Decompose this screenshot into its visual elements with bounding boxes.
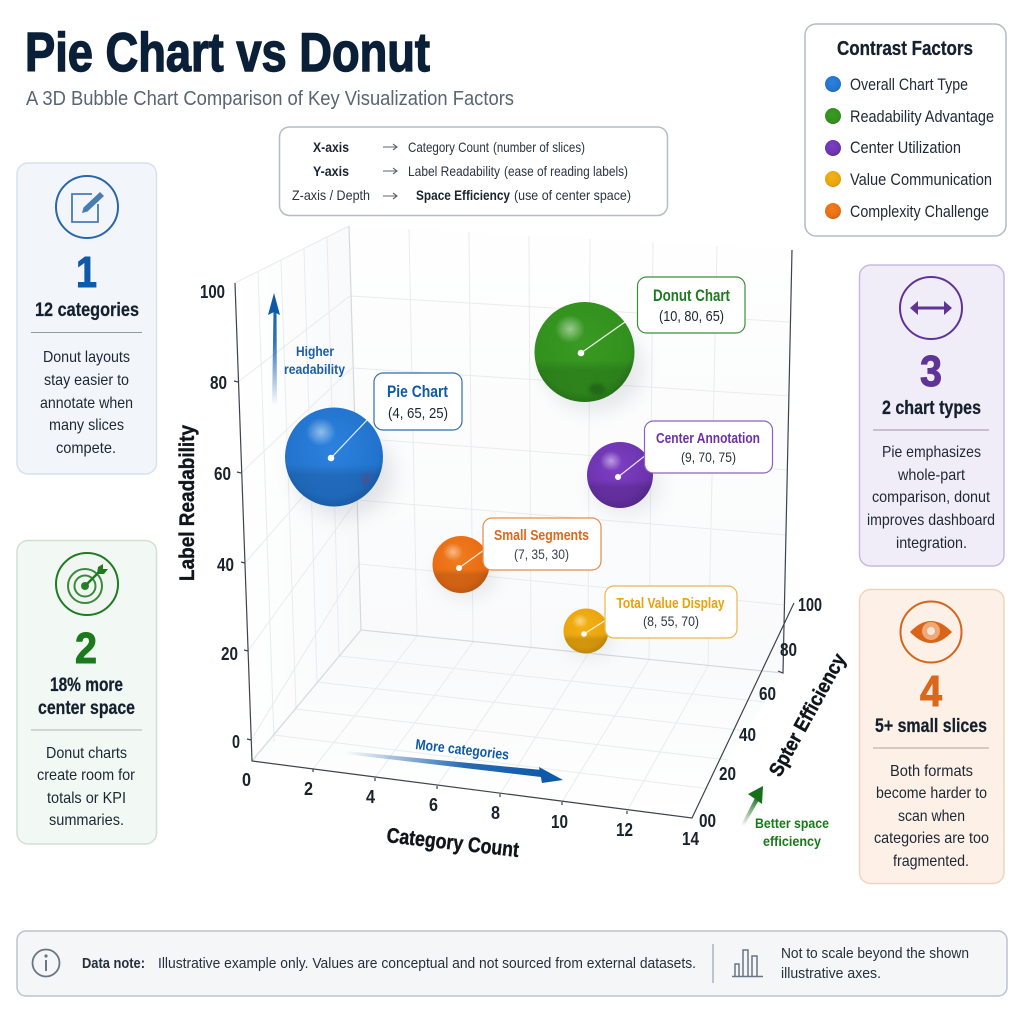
icon: target <box>56 553 118 615</box>
z axis tick labels: 00 <box>699 811 716 831</box>
panel: stat 4: categories are too <box>874 830 989 847</box>
footer: data note: Not to scale beyond the shown <box>781 946 969 962</box>
z axis tick labels: 100 <box>798 595 822 615</box>
y axis tick labels <box>200 282 240 752</box>
axis key panel: (use of center space) <box>514 187 631 203</box>
label: pie chart: Pie Chart <box>387 382 448 401</box>
panel: stat 4: 5+ small slices <box>875 716 987 737</box>
panel: stat 3: 2 chart types <box>882 398 981 419</box>
footer: data note: Data note: <box>82 956 145 972</box>
label: small segments <box>456 518 601 571</box>
arrow: better space efficiency: Better space <box>755 815 829 831</box>
panel: stat 3: integration. <box>896 535 967 552</box>
label: center annotation: Center Annotation <box>656 431 760 447</box>
axes <box>234 250 794 818</box>
panel: stat 2: summaries. <box>49 812 124 829</box>
panel: stat 3 <box>860 265 1004 566</box>
label: donut chart: Donut Chart <box>653 287 730 305</box>
legend panel: contrast factors: Value Communication <box>850 171 992 189</box>
panel: stat 3: 3 <box>920 347 942 396</box>
z axis tick labels <box>699 595 822 831</box>
subtitle: A 3D Bubble Chart Comparison of Key Visualization Factors <box>26 87 514 110</box>
x axis tick labels: 8 <box>491 803 500 823</box>
label: total value display <box>581 586 737 638</box>
x axis tick labels: 12 <box>616 820 633 840</box>
panel: stat 3: improves dashboard <box>867 512 995 529</box>
x axis tick labels: 10 <box>551 812 568 832</box>
x axis tick labels <box>242 770 699 849</box>
z axis tick labels: 60 <box>759 684 776 704</box>
axis key panel <box>280 127 668 216</box>
label: small segments: Small Segments <box>494 528 589 544</box>
panel: stat 2 <box>17 540 156 844</box>
panel: stat 2: create room for <box>37 767 136 784</box>
panel: stat 1: many slices <box>49 417 124 434</box>
axis key panel: (ease of reading labels) <box>504 163 628 179</box>
axis key panel: Y-axis <box>313 163 349 179</box>
arrow: better space efficiency: efficiency <box>763 833 821 849</box>
x axis tick labels: 2 <box>304 779 313 799</box>
panel: stat 2: center space <box>38 698 135 719</box>
panel: stat 1: compete. <box>56 440 116 457</box>
axis key panel: X-axis <box>313 139 349 155</box>
y axis tick labels: 60 <box>214 464 231 484</box>
x axis tick labels: 0 <box>242 770 251 790</box>
x axis tick labels: 4 <box>366 787 375 807</box>
icon: info <box>32 950 60 976</box>
arrow: better space efficiency <box>741 786 829 849</box>
axis key panel: Category Count <box>408 139 489 155</box>
bubble: total value display <box>564 586 737 658</box>
y axis tick labels: 40 <box>217 555 234 575</box>
bubble: small segments <box>432 518 601 598</box>
y axis tick labels: 80 <box>210 373 227 393</box>
panel: stat 2: 18% more <box>50 675 123 696</box>
y axis tick labels: 0 <box>232 732 240 752</box>
legend panel: contrast factors: Readability Advantage <box>850 108 994 126</box>
label: center annotation: (9, 70, 75) <box>681 449 736 465</box>
z axis tick labels: 80 <box>780 640 797 660</box>
footer: data note <box>17 931 1007 996</box>
label: donut chart: (10, 80, 65) <box>659 308 724 325</box>
arrow: more categories <box>345 737 563 783</box>
arrow: higher readability: Higher <box>296 343 334 359</box>
z axis tick labels: 40 <box>739 725 756 745</box>
footer: data note: Illustrative example only. Values are conceptual and not sourced from external datasets. <box>158 956 696 972</box>
x axis tick labels: 6 <box>429 795 438 815</box>
arrow: more categories: More categories <box>415 737 510 764</box>
label: pie chart: (4, 65, 25) <box>388 405 448 422</box>
panel: stat 4: fragmented. <box>893 853 969 870</box>
panel: stat 4: Both formats <box>890 763 973 780</box>
icon: bar chart <box>732 950 763 976</box>
label: total value display: (8, 55, 70) <box>643 613 699 629</box>
x axis tick labels: 14 <box>682 829 699 849</box>
legend panel: contrast factors: Center Utilization <box>850 139 961 157</box>
label: total value display: Total Value Display <box>616 596 724 612</box>
legend panel: contrast factors: Contrast Factors <box>837 38 973 60</box>
icon: double arrow <box>900 277 962 339</box>
arrow: higher readability <box>268 293 345 405</box>
icon: eye <box>900 602 962 662</box>
panel: stat 1: 1 <box>76 248 97 297</box>
panel: stat 2: totals or KPI <box>47 790 126 807</box>
panel: stat 4: scan when <box>898 808 965 825</box>
panel: stat 3: comparison, donut <box>872 489 990 506</box>
3D bubble chart <box>176 226 851 862</box>
panel: stat 1: 12 categories <box>35 300 139 321</box>
y axis tick labels: 20 <box>221 644 238 664</box>
label: donut chart <box>578 277 745 356</box>
axis key panel: Z-axis / Depth <box>292 187 370 203</box>
panel: stat 4 <box>860 590 1004 884</box>
panel: stat 3: Pie emphasizes <box>882 444 981 461</box>
label: pie chart <box>328 373 462 461</box>
panel: stat 1: annotate when <box>40 395 133 412</box>
legend panel: contrast factors <box>805 24 1006 236</box>
axis key panel: Space Efficiency <box>416 187 510 203</box>
title: Pie Chart vs Donut <box>25 21 430 83</box>
panel: stat 3: whole-part <box>897 467 965 484</box>
z axis tick labels: 20 <box>719 764 736 784</box>
bubble: donut chart <box>534 277 745 412</box>
label: center annotation <box>615 421 772 480</box>
panel: stat 1 <box>17 163 156 474</box>
panel: stat 4: 4 <box>920 667 942 716</box>
y axis tick labels: 100 <box>200 282 225 302</box>
panel: stat 2: 2 <box>75 624 97 673</box>
legend panel: contrast factors: Complexity Challenge <box>850 203 989 221</box>
icon: pencil note <box>56 176 118 238</box>
bubble: center annotation <box>587 421 772 514</box>
axis key panel: Label Readability <box>408 163 500 179</box>
legend panel: contrast factors: Overall Chart Type <box>850 76 968 94</box>
panel: stat 1: Donut layouts <box>43 349 130 366</box>
bubble: pie chart <box>285 373 462 518</box>
x axis title: Category Count <box>385 824 520 862</box>
label: small segments: (7, 35, 30) <box>514 546 569 562</box>
panel: stat 4: become harder to <box>876 785 987 802</box>
z axis title: Spter Efficiency <box>765 649 851 780</box>
panel: stat 1: stay easier to <box>44 372 129 389</box>
y axis title: Label Readability <box>176 425 199 581</box>
arrow: higher readability: readability <box>284 361 345 377</box>
panel: stat 2: Donut charts <box>46 745 127 762</box>
axis key panel: (number of slices) <box>493 139 585 155</box>
footer: data note: illustrative axes. <box>781 966 881 982</box>
